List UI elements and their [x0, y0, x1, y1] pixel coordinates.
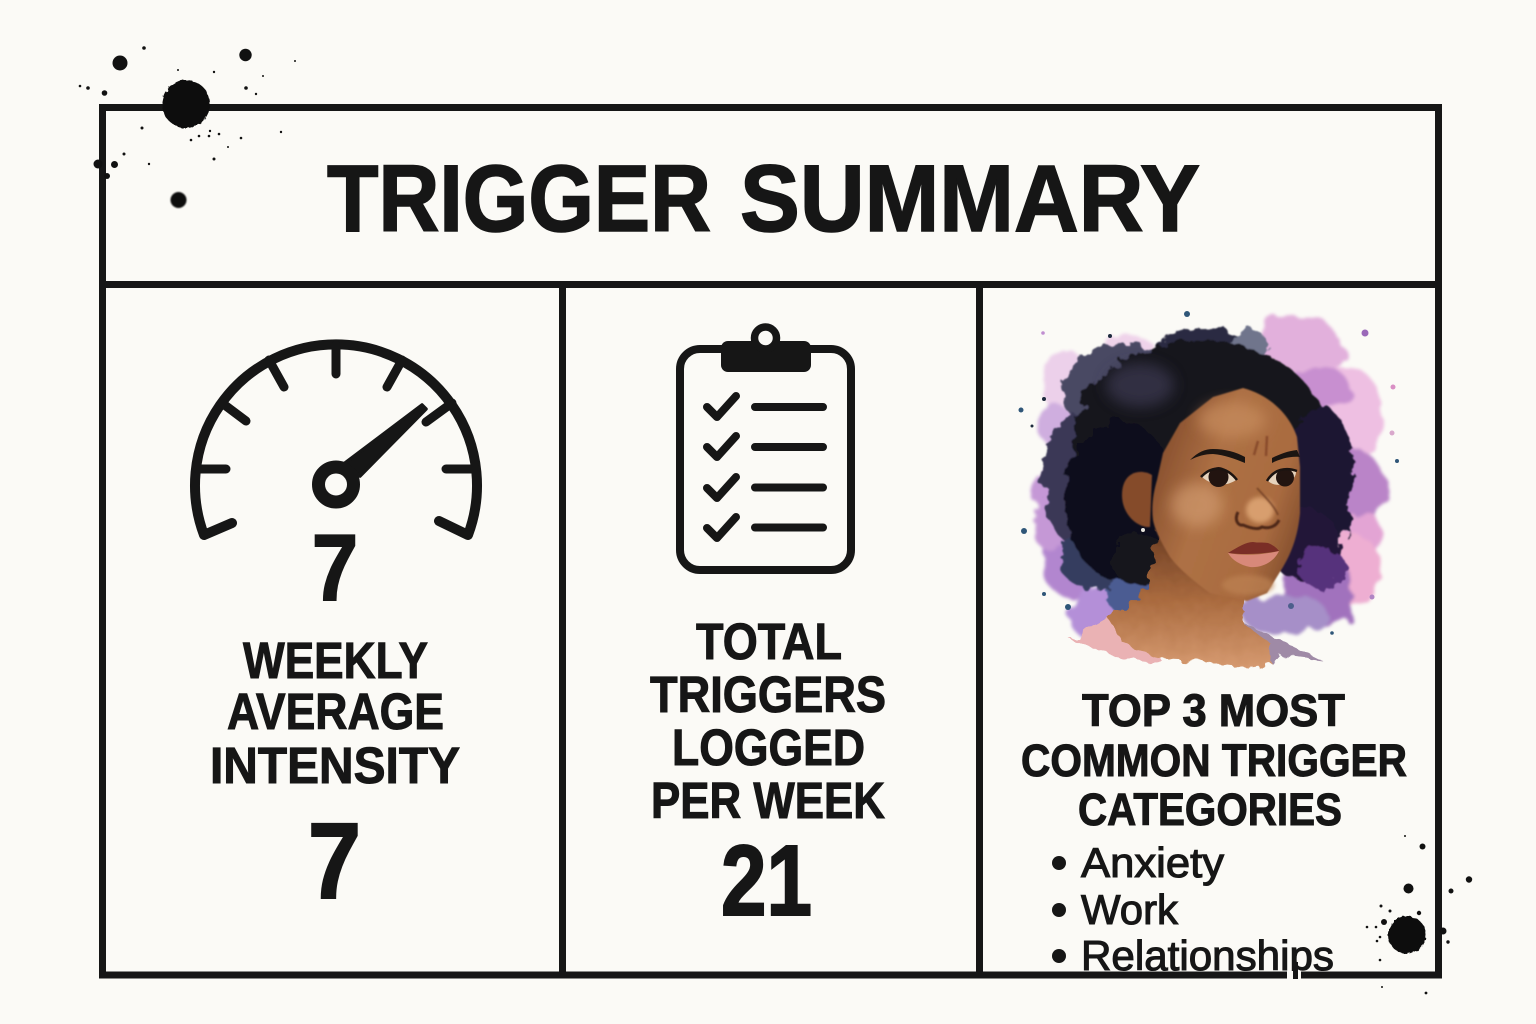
forehead highlight: [1198, 402, 1266, 438]
title: TRIGGER: [327, 146, 711, 252]
icon: gauge: [195, 344, 477, 535]
label: top 3 most common trigger categories: [1021, 685, 1407, 835]
title: [327, 146, 1200, 252]
purple and pink wash: [1032, 314, 1386, 641]
chin highlight: [1222, 575, 1274, 595]
label: total triggers logged per week: TOTAL: [696, 613, 842, 670]
label: weekly average intensity: WEEKLY: [243, 632, 428, 689]
brow furrow: [1254, 436, 1267, 456]
label: total triggers logged per week: LOGGED: [672, 719, 865, 776]
label: total triggers logged per week: TRIGGERS: [650, 666, 886, 723]
title: SUMMARY: [740, 146, 1200, 252]
panel: weekly average intensity: [195, 344, 477, 921]
list: trigger categories: Anxiety: [1081, 839, 1224, 886]
label: weekly average intensity: AVERAGE: [227, 683, 444, 740]
blue and pink paint specks: [1018, 311, 1399, 635]
list: trigger categories: [1052, 839, 1334, 979]
ink splatter: top left: [79, 46, 296, 208]
nose: [1236, 488, 1279, 528]
face: [1152, 388, 1300, 601]
hair: [1042, 328, 1354, 615]
ink splatter: bottom right: [1366, 835, 1472, 994]
neck: [1108, 530, 1272, 668]
value: total triggers: 21: [721, 825, 812, 937]
panel: outer frame with dividers: [102, 108, 1438, 975]
hair highlight: [1106, 363, 1174, 407]
label: weekly average intensity: INTENSITY: [210, 737, 460, 794]
earring: [1141, 528, 1145, 532]
eyebrows: [1190, 449, 1300, 463]
illustration: watercolor portrait of a concerned woman: [1018, 311, 1399, 668]
value: weekly average: 7: [308, 800, 361, 921]
ear: [1122, 472, 1152, 527]
gauge value: 7: [312, 515, 358, 620]
label: top 3 most common trigger categories: TOP 3 MOST: [1082, 685, 1345, 736]
list: trigger categories: Relationships: [1081, 932, 1334, 979]
panel: total triggers: [650, 327, 886, 937]
icon: clipboard checklist: [680, 327, 851, 570]
panel: top categories: [1018, 311, 1407, 979]
label: total triggers logged per week: [650, 613, 886, 829]
cheek highlight: [1171, 483, 1223, 527]
label: top 3 most common trigger categories: COMMON TRIGGER: [1021, 735, 1407, 786]
eyes: [1201, 467, 1297, 487]
label: total triggers logged per week: PER WEEK: [651, 772, 885, 829]
lips: [1228, 542, 1279, 567]
label: top 3 most common trigger categories: CATEGORIES: [1078, 784, 1342, 835]
label: weekly average intensity: [210, 632, 460, 794]
shoulders and top: [1070, 616, 1322, 664]
list: trigger categories: Work: [1081, 886, 1179, 933]
